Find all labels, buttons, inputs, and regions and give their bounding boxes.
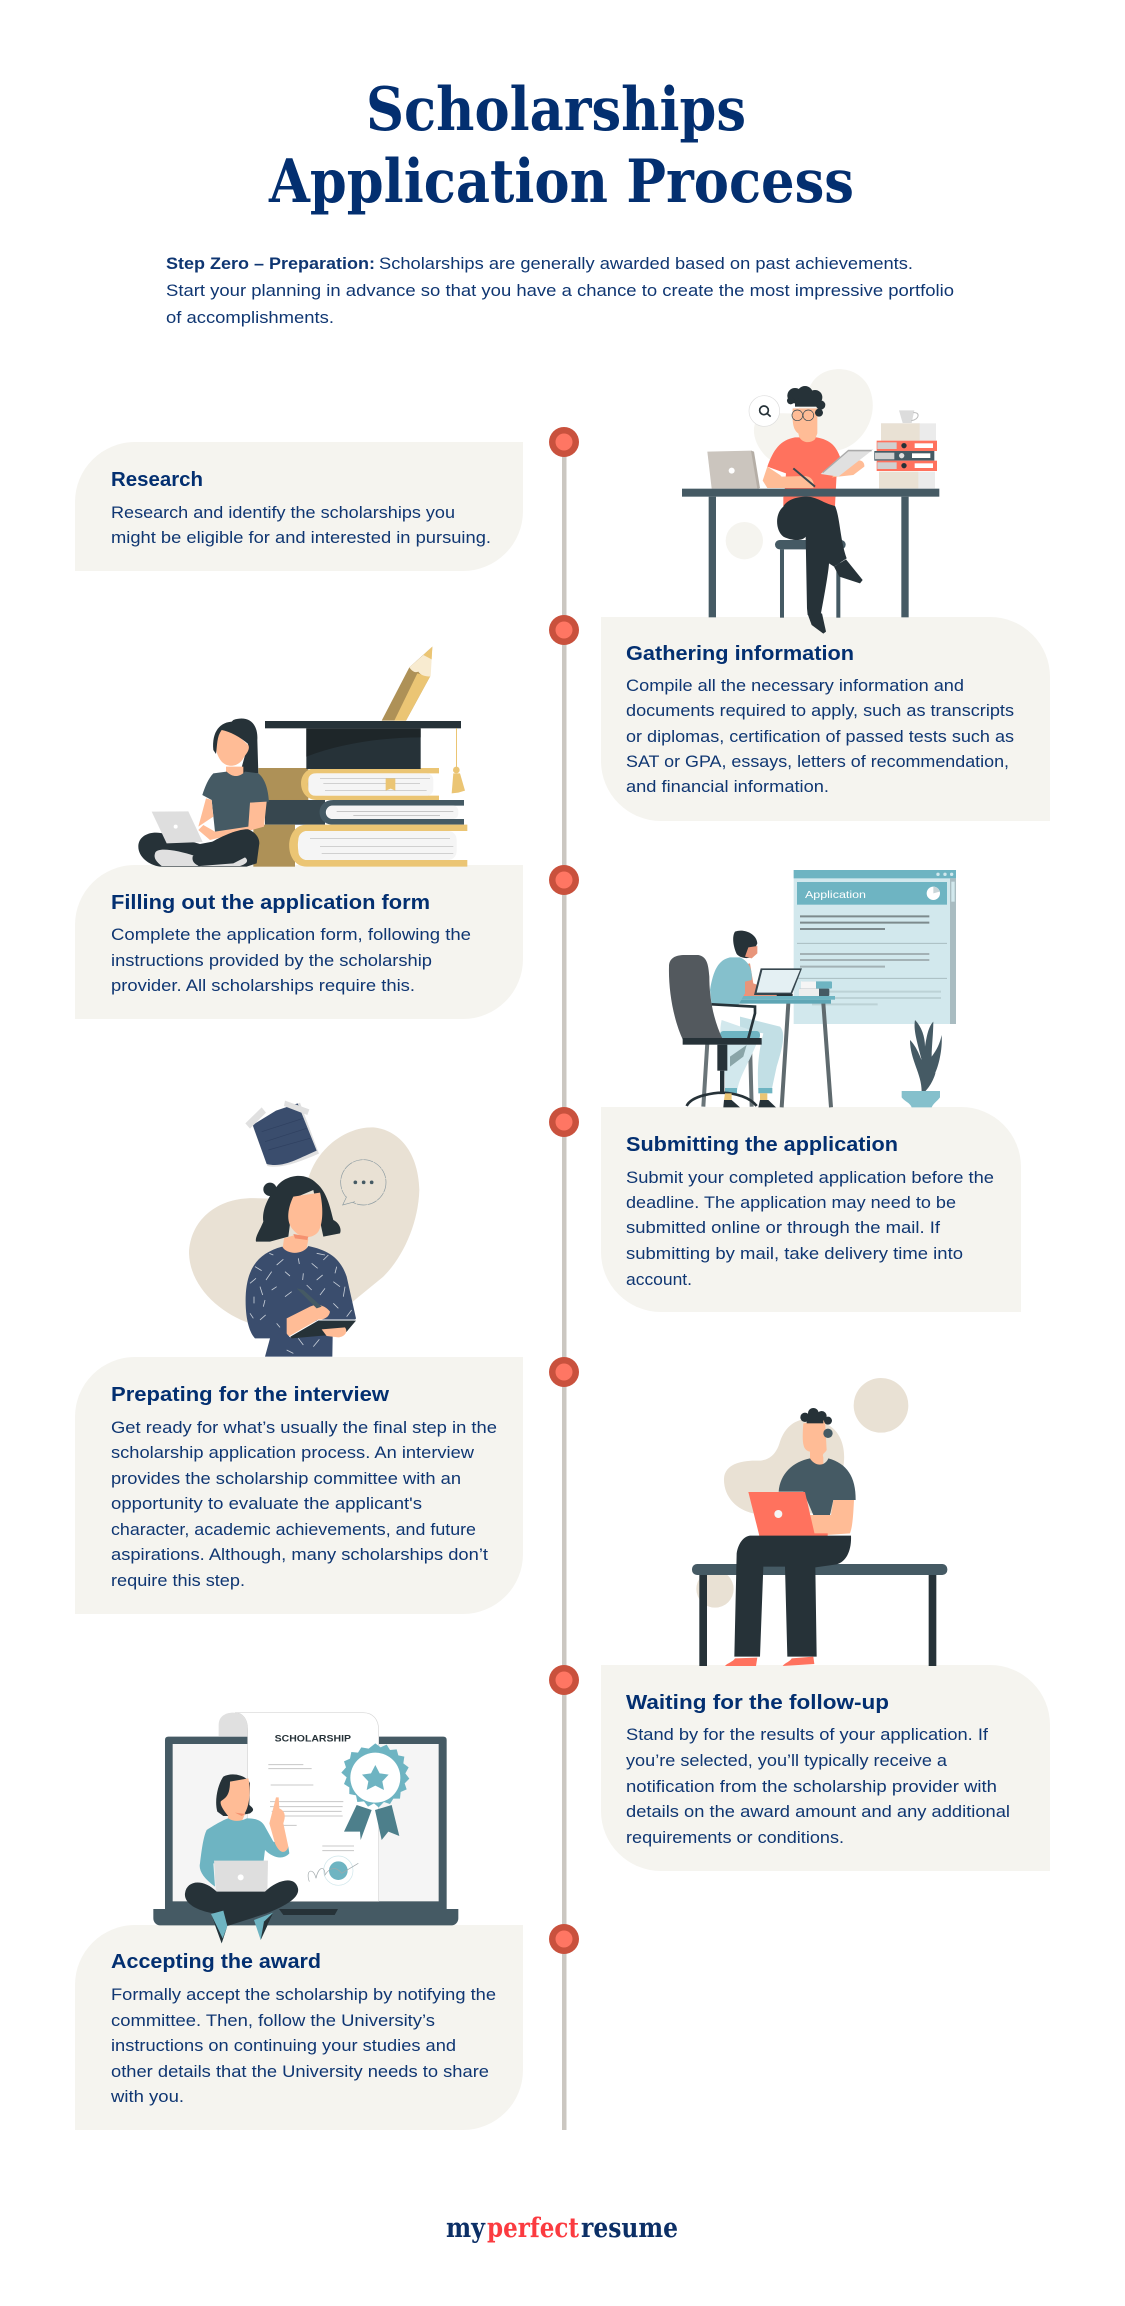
body: gathering information xyxy=(626,677,1014,796)
illustration: person applying online with application window xyxy=(669,870,956,1107)
body: preparing: scholarship application process. An interview xyxy=(111,1444,474,1462)
heading: research: Research xyxy=(111,469,203,491)
timeline dots xyxy=(549,427,579,1954)
body: waiting xyxy=(626,1726,1010,1847)
panel: accepting the award xyxy=(75,1925,523,2130)
body: filling out: Complete the application form, following the xyxy=(111,926,471,944)
heading: preparing: Prepating for the interview xyxy=(111,1384,389,1406)
panel: preparing for the interview xyxy=(75,1357,523,1614)
body: accepting: committee. Then, follow the University’s xyxy=(111,2012,435,2030)
title: Application Process xyxy=(268,147,854,217)
body: preparing: opportunity to evaluate the applicant's xyxy=(111,1495,422,1513)
illustration: person with scholarship certificate on laptop xyxy=(153,1713,458,1943)
body: accepting: with you. xyxy=(110,2088,184,2106)
heading: submitting: Submitting the application xyxy=(626,1134,898,1156)
heading: filling out: Filling out the application form xyxy=(111,892,430,914)
body: submitting: Submit your completed application before the xyxy=(626,1169,994,1187)
body: waiting: Stand by for the results of your application. If xyxy=(626,1726,988,1744)
body: submitting: submitted online or through the mail. If xyxy=(626,1219,940,1237)
illustration: person with scholarship certificate on laptop: SCHOLARSHIP xyxy=(275,1733,351,1743)
body: waiting: details on the award amount and any additional xyxy=(626,1803,1010,1821)
body: gathering information: and financial information. xyxy=(626,778,829,796)
body: gathering information: documents required to apply, such as transcripts xyxy=(626,702,1014,720)
intro text: step zero: Scholarships are generally awarded based on past achievements. xyxy=(379,255,913,273)
panel: filling out the application form xyxy=(75,865,523,1019)
body: research: Research and identify the scholarships you xyxy=(111,504,455,522)
panel: research xyxy=(75,442,523,571)
body: research: might be eligible for and interested in pursuing. xyxy=(111,529,491,547)
body: submitting xyxy=(626,1169,994,1289)
title: Scholarships xyxy=(366,75,746,145)
illustration: person applying online with application window: Application xyxy=(805,890,866,901)
panel: submitting the application xyxy=(601,1107,1021,1312)
illustration: person waiting with laptop on bench xyxy=(692,1378,947,1666)
illustration: woman preparing notes xyxy=(189,1101,419,1357)
panel: gathering information xyxy=(601,617,1050,821)
illustration: researcher at desk xyxy=(682,369,939,634)
intro text: step zero xyxy=(166,255,954,327)
intro text: step zero: Start your planning in advance so that you have a chance to create the most impressive portfolio xyxy=(166,282,954,300)
body: filling out xyxy=(111,926,471,995)
intro text: step zero: of accomplishments. xyxy=(166,309,334,327)
body: accepting xyxy=(110,1986,496,2106)
logo: myperfectresume: my xyxy=(446,2213,486,2244)
intro text: step zero: Step Zero – Preparation: xyxy=(166,255,375,273)
heading: accepting: Accepting the award xyxy=(111,1951,321,1973)
body: preparing: aspirations. Although, many scholarships don’t xyxy=(111,1546,488,1564)
body: preparing: require this step. xyxy=(111,1572,245,1590)
body: preparing: Get ready for what’s usually the final step in the xyxy=(111,1419,497,1437)
body: research xyxy=(111,504,491,547)
body: gathering information: or diplomas, certification of passed tests such as xyxy=(626,728,1014,746)
body: preparing: character, academic achievements, and future xyxy=(111,1521,476,1539)
timeline line xyxy=(562,442,566,2130)
title xyxy=(268,75,854,217)
body: accepting: other details that the University needs to share xyxy=(111,2063,489,2081)
body: accepting: Formally accept the scholarship by notifying the xyxy=(111,1986,496,2004)
body: gathering information: Compile all the necessary information and xyxy=(626,677,964,695)
body: waiting: you’re selected, you’ll typically receive a xyxy=(626,1752,948,1770)
body: submitting: deadline. The application may need to be xyxy=(626,1194,956,1212)
body: filling out: provider. All scholarships require this. xyxy=(111,977,415,995)
body: submitting: account. xyxy=(626,1271,692,1289)
body: submitting: submitting by mail, take delivery time into xyxy=(626,1245,963,1263)
body: preparing: provides the scholarship committee with an xyxy=(111,1470,461,1488)
illustration: student with books and graduation cap xyxy=(138,647,467,867)
body: filling out: instructions provided by the scholarship xyxy=(111,952,432,970)
logo: myperfectresume: resume xyxy=(581,2213,678,2244)
panel: waiting for the follow-up xyxy=(601,1665,1050,1871)
heading: gathering information: Gathering information xyxy=(626,643,854,665)
body: gathering information: SAT or GPA, essays, letters of recommendation, xyxy=(626,753,1009,771)
body: accepting: instructions on continuing your studies and xyxy=(111,2037,456,2055)
logo: myperfectresume: perfect xyxy=(487,2213,579,2244)
heading: waiting: Waiting for the follow-up xyxy=(626,1692,889,1714)
logo: myperfectresume xyxy=(446,2213,678,2244)
body: waiting: notification from the scholarship provider with xyxy=(626,1778,997,1796)
body: preparing xyxy=(111,1419,497,1590)
body: waiting: requirements or conditions. xyxy=(626,1829,844,1847)
